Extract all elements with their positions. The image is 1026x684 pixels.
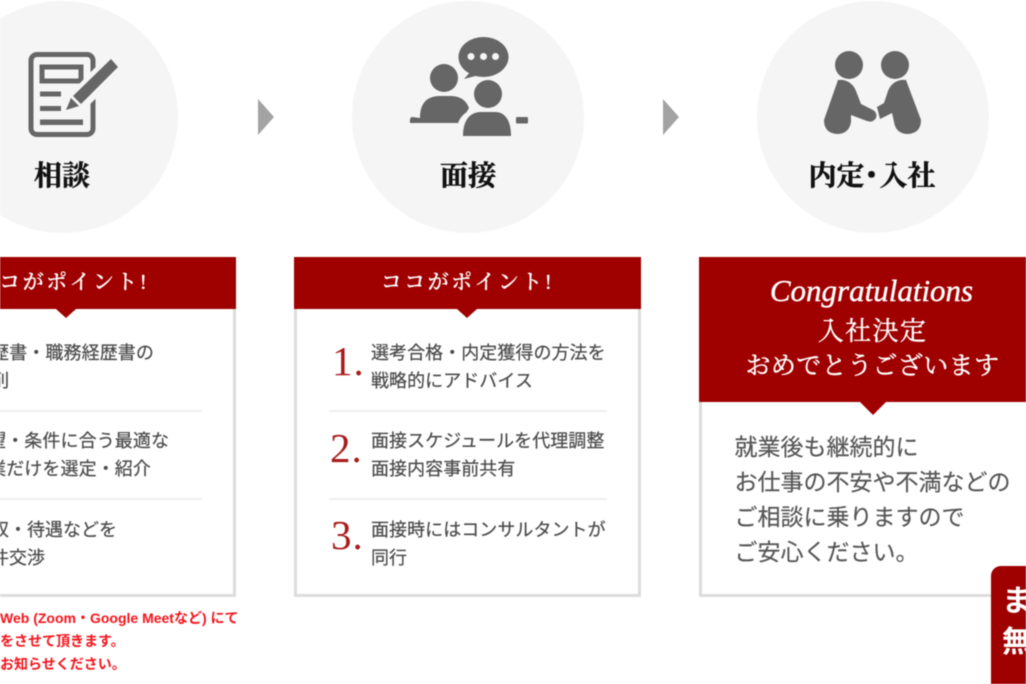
text: step 1 point 1: [0, 342, 154, 390]
number 2: 2.: [330, 425, 363, 471]
circle: step 3 offer and joining: [756, 1, 988, 233]
note: web interview notice: お知らせください。: [0, 656, 126, 672]
panel header: step 1: [0, 257, 236, 309]
panel header: step 2: ココがポイント!: [381, 270, 554, 294]
text: step 1 point 3: [0, 520, 117, 568]
note: web interview notice: Web (Zoom・Google Meetなど) にて: [0, 610, 239, 626]
text: step 3 message: [734, 434, 1010, 564]
panel: step 2 points: [294, 257, 641, 597]
text: step 2 point 2: 面接内容事前共有: [371, 458, 515, 478]
pointer: step 1: [56, 309, 76, 318]
text: Congratulations: Congratulations: [770, 273, 973, 308]
circle: step 2 interview: [352, 1, 584, 233]
text: step 3 message: ご安心ください。: [734, 538, 918, 564]
text: step 2 point 3: 面接時にはコンサルタントが: [371, 520, 606, 540]
panel: step 3 message: [699, 257, 1026, 597]
heading: 相談: 相談: [34, 161, 90, 192]
panel header: step 2: [294, 257, 641, 309]
text: step 2 point 2: [371, 430, 604, 478]
text: おめでとうございます: おめでとうございます: [745, 353, 1000, 380]
icon: handshake: [823, 50, 922, 135]
arrow: step 1 to 2: [258, 99, 274, 135]
icon: two people talking: [409, 36, 529, 137]
panel header: congratulations: [699, 257, 1026, 402]
text: 入社決定: 入社決定: [818, 317, 927, 346]
badge: free consultation: [991, 566, 1026, 684]
pointer: step 3: [860, 402, 886, 415]
number 1: 1.: [332, 338, 365, 384]
note: web interview notice: をさせて頂きます。: [0, 633, 125, 649]
text: step 2 point 2: 面接スケジュールを代理調整: [371, 430, 604, 450]
text: step 2 point 1: [370, 342, 606, 390]
heading: 内定・入社: 内定・入社: [808, 161, 936, 192]
text: step 2 point 3: [371, 520, 606, 568]
text: step 3 message: ご相談に乗りますので: [734, 504, 964, 530]
text: step 2 point 1: 戦略的にアドバイス: [371, 370, 533, 390]
text: step 2 point 1: 選考合格・内定獲得の方法を: [371, 342, 606, 362]
heading: 面接: 面接: [440, 161, 496, 192]
text: step 3 message: 就業後も継続的に: [734, 434, 918, 460]
icon: document and pencil: [28, 51, 118, 138]
text: step 2 point 3: 同行: [371, 548, 407, 568]
text: step 3 message: お仕事の不安や不満などの: [734, 468, 1010, 494]
text: step 1 point 2: [0, 430, 169, 478]
pointer: step 2: [456, 309, 476, 318]
note: web interview notice: [0, 610, 239, 672]
number 3: 3.: [331, 512, 364, 558]
circle: step 1 consultation: [0, 1, 178, 233]
arrow: step 2 to 3: [663, 99, 679, 135]
panel: step 1 points: [0, 257, 236, 597]
